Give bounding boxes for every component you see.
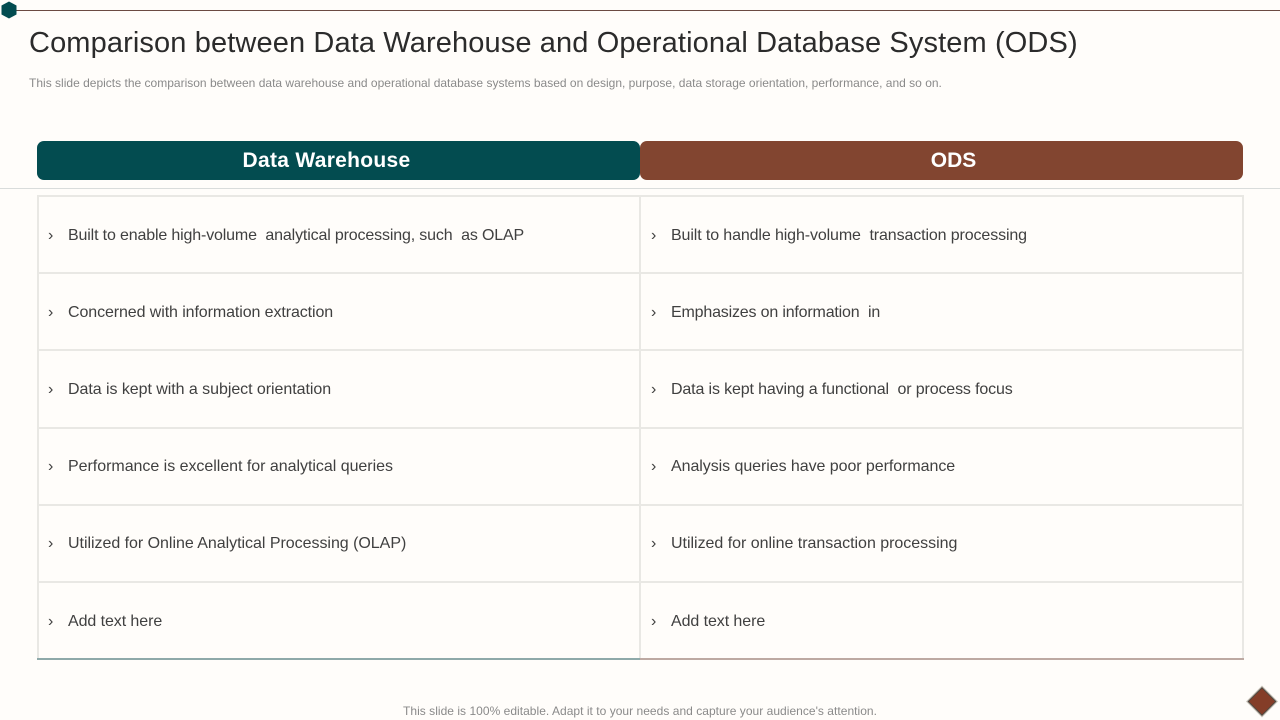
row 6: Add text here bbox=[671, 613, 765, 630]
row 4 bbox=[48, 458, 955, 475]
header: Data Warehouse: Data Warehouse bbox=[243, 149, 410, 172]
row 5: › bbox=[48, 535, 53, 552]
row 1 bbox=[48, 227, 1027, 244]
row 3: Data is kept having a functional or process focus bbox=[671, 381, 1013, 398]
header: ODS bbox=[640, 141, 1243, 180]
row 2: Emphasizes on information in bbox=[671, 304, 880, 321]
footer note: This slide is 100% editable. Adapt it to your needs and capture your audience's attention. bbox=[403, 704, 877, 718]
row 5: Utilized for Online Analytical Processing (OLAP) bbox=[68, 535, 406, 552]
row 2: › bbox=[48, 304, 53, 321]
row 6: Add text here bbox=[68, 613, 162, 630]
icon: hexagon bbox=[2, 2, 16, 18]
icon: diamond bbox=[1246, 686, 1278, 718]
row 6 bbox=[48, 613, 765, 630]
row 4: Analysis queries have poor performance bbox=[671, 458, 955, 475]
row 4: Performance is excellent for analytical queries bbox=[68, 458, 393, 475]
header: ODS: ODS bbox=[931, 149, 976, 172]
subtitle: This slide depicts the comparison between data warehouse and operational database systems based on design, purpose, data storage orientation, performance, and so on. bbox=[29, 76, 942, 90]
row 1: Built to enable high-volume analytical processing, such as OLAP bbox=[68, 227, 524, 244]
row 3: › bbox=[651, 381, 656, 398]
row 6: › bbox=[651, 613, 656, 630]
row 5: › bbox=[651, 535, 656, 552]
row 2: Concerned with information extraction bbox=[68, 304, 333, 321]
row 4: › bbox=[48, 458, 53, 475]
header: Data Warehouse bbox=[37, 141, 640, 180]
horizontal band line bbox=[0, 188, 1280, 189]
row 2 bbox=[48, 304, 880, 321]
row 1: › bbox=[48, 227, 53, 244]
row 5 bbox=[48, 535, 957, 552]
row 3: › bbox=[48, 381, 53, 398]
row 4: › bbox=[651, 458, 656, 475]
top rule bbox=[8, 10, 1280, 11]
row 1: › bbox=[651, 227, 656, 244]
row 1: Built to handle high-volume transaction processing bbox=[671, 227, 1027, 244]
row 2: › bbox=[651, 304, 656, 321]
row 3 bbox=[48, 381, 1013, 398]
title: Comparison between Data Warehouse and Operational Database System (ODS) bbox=[29, 27, 1078, 59]
row 5: Utilized for online transaction processing bbox=[671, 535, 957, 552]
row 6: › bbox=[48, 613, 53, 630]
row 3: Data is kept with a subject orientation bbox=[68, 381, 331, 398]
